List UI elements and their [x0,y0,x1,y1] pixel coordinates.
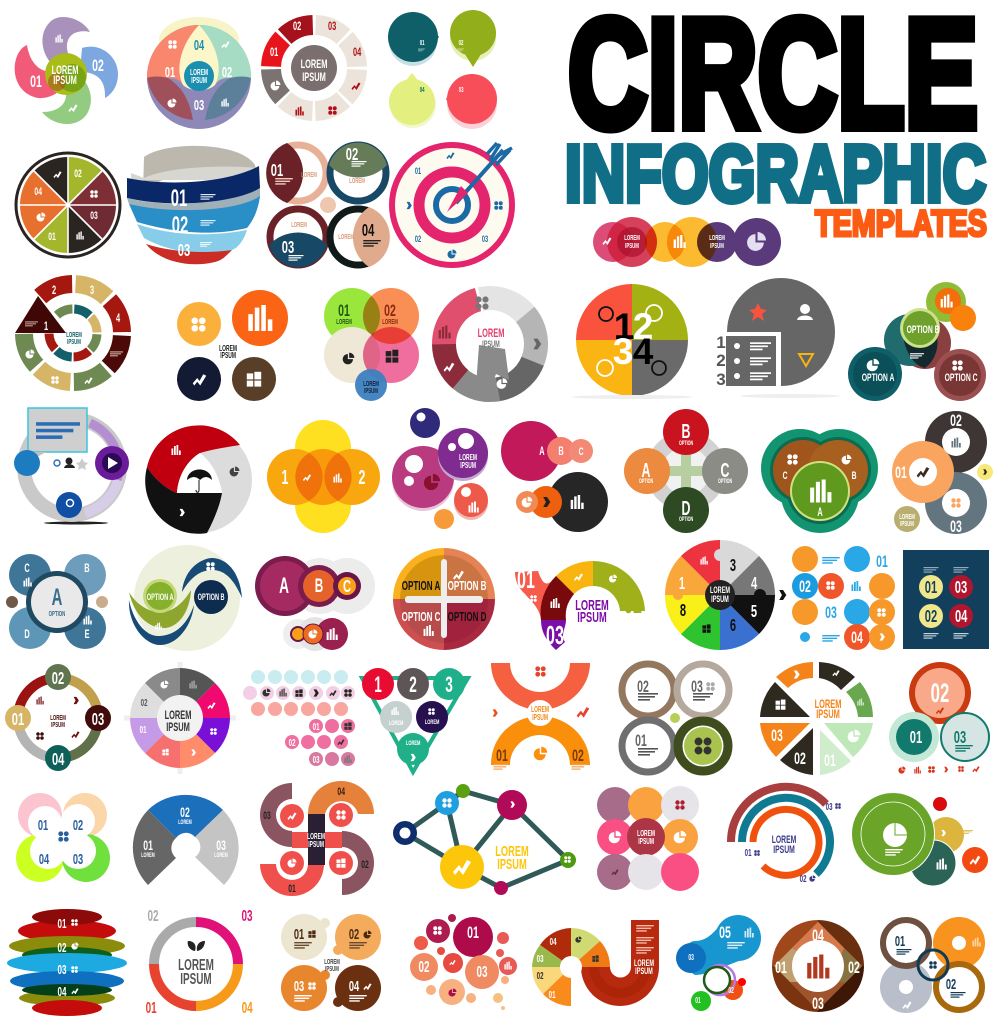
infographic: grey ring with crimson: IPSUM [482,339,500,349]
infographic: petal venn circle: 04 [194,37,204,54]
infographic: four quadrant pie with numbers: 4 [633,331,654,372]
infographic: four bubble blocks: 04 [349,978,359,995]
infographic: segmented ring with center: 03 [328,20,337,34]
infographic: quadrant circle A B C D: OPTION B [448,579,487,594]
infographic: eight-wedge pie in black ring: 03 [90,209,98,221]
infographic: striped bowl: 03 [178,240,190,261]
infographic: stacked discs: 04 [58,985,66,1000]
infographic: four quadrant pie with numbers: 3 [613,331,633,372]
infographic: dot matrix [243,670,355,766]
infographic: glass options cross: OPTION [718,478,733,485]
infographic: blue clover option A: OPTION [49,611,65,618]
infographic: option circles A B C: OPTION C [945,371,978,383]
infographic: three-part fan [133,795,239,885]
infographic: eight color pie with center: IPSUM [166,721,190,735]
infographic: navy panel with numbers [903,550,989,649]
infographic: orange blue dot grid: 04 [851,627,863,647]
infographic: purple pink bubbles [392,408,488,529]
infographic: crimson and black circles [501,421,608,532]
infographic: puzzle pie: 6 [730,615,736,636]
center label [45,53,87,95]
infographic: four color ring with leaf [146,907,253,1017]
infographic: swirl cross: 02 [361,858,369,870]
infographic: orange blue dot grid: 02 [799,576,811,596]
infographic: double segmented ring: 2 [52,284,57,298]
overlapping circles under title: IPSUM [710,243,724,250]
infographic: pinwheel: 01 [30,71,42,91]
infographic: bubble cluster: 03 [476,963,488,981]
infographic: three numbered rings: LOREM [899,514,915,521]
infographic: node network: LOREM [495,843,529,860]
infographic: yellow orange cross [267,420,380,533]
infographic: glass options cross: D [682,497,690,520]
infographic: four color ring with leaf: 04 [242,999,253,1017]
infographic: exploded pie [760,662,873,775]
infographic: green trefoil: B [852,469,857,481]
infographic: serpentine pie: 04 [550,935,557,947]
infographic: venn of colored circles: LOREM [336,319,352,326]
infographic: four color ring with leaf: 01 [146,999,157,1017]
infographic: bubble cluster: 02 [418,958,430,976]
infographic: four quadrant pie with numbers: 1 [614,306,634,347]
infographic: triangle of numbered circles [362,668,468,772]
infographic: segmented ring with center: 04 [353,46,362,60]
infographic: three numbered rings: 02 [950,410,962,430]
infographic: three overlapping option rings: 01 [910,727,922,748]
message box [28,408,87,462]
infographic: crescent flower [16,793,110,882]
infographic: exploded pie: IPSUM [816,708,840,722]
infographic: three-part fan: 02 [180,805,190,821]
infographic: arch with purple label: 01 [517,564,535,594]
infographic: ABC maroon circles: B [315,576,323,597]
infographic: venn of colored circles: 01 [338,300,350,320]
infographic: eight-wedge pie in black ring: 02 [74,167,82,179]
infographic: petal venn circle: 03 [194,97,204,114]
infographic: swirl cross: 04 [337,785,346,797]
infographic: ring with four numbered nodes: 03 [92,709,104,730]
infographic: four rings with lens caps: LOREM [301,172,317,179]
infographic: puzzle pie: LOREM [710,585,730,595]
infographic: orange blue dot grid [792,546,895,650]
infographic: triangle of numbered circles: LOREM [406,740,421,747]
infographic: four bubble blocks: 01 [294,926,304,943]
infographic: four rings with lens caps: LOREM [291,222,307,229]
infographic: target with arrow [392,143,512,265]
infographic: grey ring with crimson [425,279,555,409]
infographic: puzzle pie: 4 [751,573,758,594]
infographic: four flat circles: IPSUM [220,352,236,360]
infographic: option circles A B C: OPTION B [907,323,940,335]
infographic: green trefoil: A [817,506,823,520]
infographic: glass options cross [624,409,748,533]
infographic: four quadrant pie with numbers [572,284,692,399]
infographic: venn of colored circles: 02 [384,300,396,320]
infographic: triangle of numbered circles: 3 [445,672,453,697]
infographic: segmented ring with center [253,7,375,129]
infographic: puzzle pie [665,540,786,650]
infographic: node network [393,784,576,895]
infographic: three overlapping option rings: 02 [931,678,949,708]
infographic: four rings with lens caps: LOREM [338,234,354,241]
infographic: yin yang options [129,545,242,651]
infographic: navy panel with numbers: 01 [925,577,937,598]
infographic: node network: IPSUM [497,856,527,873]
infographic: brown circle with bars: 02 [848,957,860,977]
infographic: eight color pie with center: LOREM [165,709,191,723]
infographic: four speech bubbles: 02 [459,40,463,47]
infographic: ring with four numbered nodes [5,664,111,771]
infographic: striped bowl [127,146,260,264]
infographic: eight-wedge pie in black ring [16,153,120,257]
infographic: venn of colored circles [324,288,419,401]
infographic: dot matrix: 03 [313,753,320,765]
center label: IPSUM [53,74,77,88]
infographic: four color ring with leaf: LOREM [178,956,214,974]
infographic: ring with four numbered nodes: 02 [52,668,64,689]
infographic: four quadrant pie with numbers: 2 [633,306,653,347]
infographic: triangle of numbered circles: LOREM [425,719,440,726]
infographic: three overlapping option rings [889,662,989,774]
infographic: grey circle with list panel [716,278,840,398]
infographic: four color ring with leaf: 02 [147,907,159,925]
infographic: venn of colored circles: LOREM [382,319,398,326]
infographic: three by three circles: IPSUM [638,838,654,846]
infographic: puzzle pie: 5 [751,601,757,622]
infographic: double segmented ring: 1 [44,320,49,334]
infographic: exploded pie: 01 [824,750,836,770]
infographic: dot matrix: 01 [313,720,320,732]
infographic: ring with four numbered nodes: 04 [52,749,65,770]
infographic: eight-wedge pie in black ring: 01 [48,230,56,242]
infographic: grey ring with crimson: LOREM [478,327,504,341]
infographic: glass options cross: OPTION [679,516,694,523]
overlapping circles under title [593,217,781,267]
infographic: ABC maroon circles: A [279,573,289,598]
infographic: arch with purple label [515,561,645,650]
infographic: quadrant circle A B C D: OPTION C [402,610,441,625]
infographic: ring with four numbered nodes: 01 [12,709,24,730]
infographic: ring with four numbered nodes: IPSUM [51,722,65,729]
infographic: navy panel with numbers: 03 [955,577,967,598]
infographic: quadrant circle A B C D: OPTION A [402,579,440,594]
infographic: arch with purple label: LOREM [575,597,609,614]
infographic: venn of colored circles: IPSUM [364,388,378,395]
infographic: orange blue dot grid: 03 [825,602,837,622]
infographic: serpentine pie: 01 [549,988,556,1000]
infographic: segmented ring with center: 01 [270,46,279,60]
infographic: crescent flower: 02 [73,817,83,834]
infographic: eight color pie with center: 01 [140,723,147,735]
infographic: arch with purple label: IPSUM [577,609,607,626]
infographic: pinwheel: 02 [92,55,104,75]
infographic: four speech bubbles: 01 [420,40,425,47]
infographic: three numbered rings: 03 [950,516,962,536]
infographic: dot matrix: 02 [289,736,296,748]
center label: LOREM [52,64,78,78]
infographic: grey circle with list panel: 1 [716,333,726,352]
infographic: target with arrow: 03 [482,234,488,244]
infographic: glass options cross: OPTION [679,440,694,447]
infographic: three-part fan: LOREM [214,852,228,859]
infographic: orange blue dot grid: 01 [876,551,888,571]
infographic: glass options cross: OPTION [639,478,654,485]
infographic: concentric arcs: IPSUM [773,843,795,855]
icon row [898,766,980,774]
infographic: blue blob with rings: 03 [688,954,694,962]
lower small circles [283,617,348,651]
infographic: yin yang options: OPTION A [147,592,174,602]
infographic: brown circle with bars: 04 [812,925,824,945]
infographic: X shaped arcs: 02 [572,745,584,765]
infographic: blue clover option A: A [52,585,62,611]
infographic: four bubble blocks: 03 [294,978,304,995]
infographic: blue clover option A: E [85,628,90,642]
infographic: mixed rings and discs: 01 [895,933,905,950]
infographic: stacked discs: 01 [58,917,66,932]
infographic: glass options cross: A [642,459,650,482]
infographic: venn of colored circles: LOREM [363,381,379,388]
infographic: yin yang options: OPTION B [198,592,225,602]
infographic: four outlined rings: 03 [691,676,703,696]
infographic: serpentine pie: 03 [537,952,544,964]
infographic: serpentine pie: LOREM [634,958,654,968]
infographic: mixed rings and discs: 02 [946,976,956,993]
infographic: eight color pie with center: 02 [141,696,148,708]
infographic: arch with purple label: 02 [624,589,642,619]
infographic: four outlined rings: 02 [637,676,649,696]
infographic: concentric arcs [731,787,841,884]
infographic: three by three circles: LOREM [637,830,655,838]
infographic: crimson and black circles: A [539,445,545,459]
infographic: three-part fan: 01 [143,838,153,854]
infographic: blue blob with rings: 01 [695,997,701,1005]
infographic: exploded pie: 02 [794,748,806,768]
infographic: double segmented ring: 4 [116,312,121,326]
infographic: triangle of numbered circles: LOREM [389,720,404,727]
infographic: petal venn circle: 02 [222,64,232,81]
infographic: swirl cross: LOREM [307,833,325,841]
infographic: target with arrow: 01 [415,166,421,176]
infographic: ring with four numbered nodes: LOREM [50,715,66,722]
infographic: four outlined rings: 01 [635,730,647,750]
infographic: navy panel with numbers: 02 [925,606,937,627]
infographic: three numbered rings: 01 [895,462,907,482]
infographic: petal venn circle: IPSUM [191,77,207,85]
infographic: mixed rings and discs [880,917,985,1013]
infographic: four rings with lens caps: LOREM [349,178,365,185]
overlapping circles under title: LOREM [709,235,725,242]
infographic: X shaped arcs: 01 [496,745,508,765]
infographic: three-part fan: LOREM [178,819,192,826]
infographic: X shaped arcs: LOREM [531,706,549,714]
infographic: concentric arcs: LOREM [772,833,796,845]
infographic: puzzle pie: IPSUM [711,594,729,604]
infographic: four rings with lens caps [266,143,390,267]
infographic: four rings with lens caps: 02 [346,144,358,165]
infographic: four outlined rings [622,664,729,772]
infographic: four flat circles: LOREM [219,345,237,353]
infographic: circular process with message box [14,408,129,524]
infographic: yellow orange cross: 1 [282,466,288,489]
infographic: swirl cross: IPSUM [308,841,324,849]
infographic: green trefoil: C [783,469,788,481]
infographic: three numbered rings [892,410,993,536]
infographic: exploded pie: 03 [771,725,783,745]
infographic: blue blob with rings [676,915,761,1011]
infographic: brown circle with bars: 03 [812,993,824,1013]
infographic: ABC maroon circles: C [343,576,351,597]
infographic: quadrant circle A B C D [393,548,495,650]
infographic: purple pink bubbles: LOREM [459,454,477,462]
infographic: glass options cross: C [721,459,729,482]
infographic: yellow orange cross: 2 [359,466,365,489]
infographic: stacked discs: 02 [58,941,66,956]
infographic: large green circle with satellites [851,792,988,886]
infographic: four rings with lens caps: 03 [282,237,294,258]
infographic: blue blob with rings: 05 [719,922,731,942]
infographic: stacked discs [7,909,127,1016]
infographic: petal venn circle: LOREM [190,69,208,77]
infographic: puzzle pie: 3 [730,555,736,576]
infographic: stacked discs: 03 [58,963,66,978]
overlapping circles under title: IPSUM [625,243,639,250]
infographic: crescent flower: 03 [73,851,83,868]
infographic: four speech bubbles: 04 [420,87,425,94]
infographic: four rings with lens caps: 04 [362,220,375,241]
infographic: double segmented ring: LOREM [66,332,82,339]
infographic: concentric arcs: 02 [800,872,807,884]
infographic: segmented ring with center: LOREM [301,58,327,72]
infographic: striped bowl: 01 [171,186,187,212]
infographic: eight-wedge pie in black ring: 04 [34,185,43,197]
infographic: four bubble blocks: LOREM [324,959,340,966]
infographic: puzzle pie: 8 [680,600,686,621]
infographic: four color ring with leaf: IPSUM [180,970,212,988]
infographic: double segmented ring: IPSUM [67,339,81,346]
infographic: segmented ring with center: 02 [293,20,302,34]
infographic: concentric arcs: 01 [745,846,752,858]
infographic: double segmented ring: 3 [90,284,95,298]
infographic: segmented ring with center: IPSUM [302,71,326,85]
infographic: ABC maroon circles [255,556,375,651]
infographic: blue clover option A [6,554,108,649]
infographic: exploded pie: LOREM [815,698,841,712]
overlapping circles under title: LOREM [624,235,640,242]
infographic: triangle of numbered circles: 2 [409,672,417,697]
infographic: serpentine pie: 02 [537,969,544,981]
infographic: eight color pie with center [124,662,236,774]
infographic: four bubble blocks: IPSUM [325,966,339,973]
infographic: three-part fan: 03 [216,838,226,854]
infographic: swirl cross [260,781,374,896]
infographic: brown circle with bars: 01 [775,957,787,977]
infographic: quadrant circle A B C D: OPTION D [448,610,487,625]
infographic: option circles A B C [848,282,986,401]
infographic: four color ring with leaf: 03 [241,907,253,925]
infographic: umbrella circle [145,425,252,534]
infographic: crescent flower: 01 [38,817,48,834]
arrow [447,143,512,212]
infographic: three by three circles [597,786,699,891]
infographic: navy panel with numbers: 04 [955,606,968,627]
infographic: concentric arcs: 03 [826,800,833,812]
infographic: bubble cluster [410,914,517,1010]
infographic: X shaped arcs: IPSUM [532,714,548,722]
infographic: four speech bubbles: 03 [459,87,464,94]
infographic: target with arrow: 02 [415,234,421,244]
infographic: option circles A B C: OPTION A [862,371,895,383]
infographic: green trefoil [761,429,878,533]
infographic: puzzle pie: 1 [679,573,685,594]
infographic: petal venn circle [147,17,251,129]
infographic: grey circle with list panel: 2 [716,351,726,370]
infographic: blue clover option A: D [24,628,30,642]
infographic: petal venn circle: 01 [165,64,175,81]
infographic: four speech bubbles [388,10,497,129]
infographic: four rings with lens caps: 01 [271,160,283,181]
infographic: striped bowl: 02 [172,213,188,239]
infographic: crimson and black circles: C [579,445,584,457]
infographic: blue clover option A: B [84,562,90,576]
infographic: three-part fan: LOREM [141,852,155,859]
infographic: swirl cross: 01 [288,882,296,894]
infographic: four bubble blocks: 02 [349,926,359,943]
umbrella icon [187,470,212,492]
infographic: three numbered rings: IPSUM [900,521,914,528]
infographic: X shaped arcs [491,663,590,770]
infographic: double segmented ring [4,264,142,402]
infographic: three overlapping option rings: 03 [954,727,966,748]
infographic: serpentine pie [532,920,659,1006]
infographic: swirl cross: 03 [263,809,271,821]
infographic: crimson and black circles: B [558,445,564,459]
infographic: crescent flower: 04 [39,851,49,868]
infographic: brown circle with bars [772,920,864,1013]
infographic: pinwheel [15,17,118,124]
infographic: serpentine pie: IPSUM [635,966,653,976]
infographic: blue clover option A: C [24,562,30,576]
infographic: arch with purple label: 03 [546,620,564,650]
infographic: grey circle with list panel: 3 [716,370,726,389]
infographic: bubble cluster: 01 [467,922,479,942]
infographic: triangle of numbered circles: 1 [374,672,382,697]
infographic: four flat circles [177,290,288,401]
infographic: purple pink bubbles: IPSUM [460,462,476,470]
infographic: blue blob with rings: 02 [728,987,734,995]
infographic: four bubble blocks [281,914,381,1011]
infographic: glass options cross: B [682,420,690,443]
